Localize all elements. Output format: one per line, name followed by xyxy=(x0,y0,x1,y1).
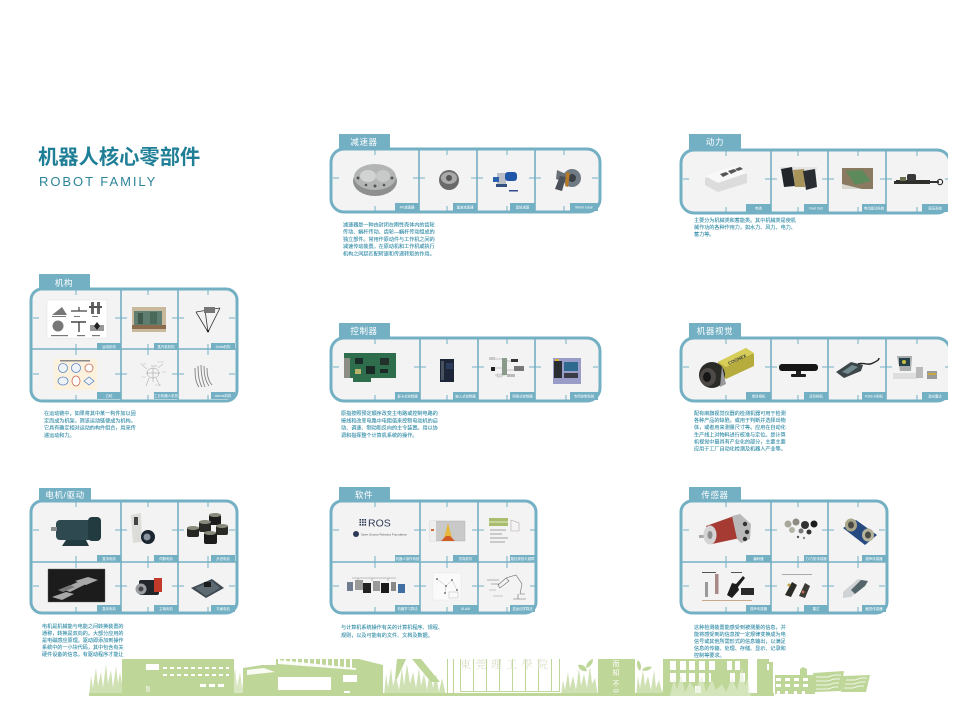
title xyxy=(38,145,200,189)
caption: 直流电机: 直流电机 xyxy=(102,556,116,561)
frame xyxy=(681,150,950,213)
text: 机器视觉 description: 生产线上对物料进行校准与定位。是计算 xyxy=(694,431,786,438)
image: path planning xyxy=(489,518,519,542)
caption: 路径规划与避障 xyxy=(510,555,535,562)
tab: 传感器 xyxy=(689,487,741,502)
text: 机构 description: 它具有确定相对运动的构件组合，用来传 xyxy=(44,424,136,432)
caption: 嵌入式控制器 xyxy=(453,392,478,400)
text: 机器视觉 description: 应用于工厂自动化检测及机器人产业等。 xyxy=(694,446,786,452)
image: PCB controller card xyxy=(344,353,396,382)
frame xyxy=(31,289,237,401)
caption: 凸轮: 凸轮 xyxy=(106,393,113,398)
tab: 减速器: 减速器 xyxy=(350,137,378,147)
text: 减速器 description: 减速器是一种由封闭在刚性壳体内的齿轮 xyxy=(343,222,435,228)
caption: Fuel Cell: Fuel Cell xyxy=(809,206,823,210)
image: spindle motor xyxy=(136,578,162,595)
image: worm gear xyxy=(555,169,581,191)
text: 动力 description: 蓄力等。 xyxy=(694,231,714,238)
text: 减速器 description: 传动、蜗杆传动、齿轮—蜗杆传动组成的 xyxy=(343,229,435,236)
school name: 東莞理工學院 xyxy=(460,656,552,672)
caption: 平面电机: 平面电机 xyxy=(216,606,230,611)
tab: 控制器 xyxy=(339,323,390,339)
icon: leaves xyxy=(578,659,652,671)
caption: 雷达 xyxy=(804,605,828,612)
image: industrial robot sketch xyxy=(140,362,166,386)
caption: 谐波减速器: 谐波减速器 xyxy=(457,204,474,210)
image: electric drive system xyxy=(842,168,873,189)
image: battery xyxy=(705,166,747,192)
image: machine learning network xyxy=(347,578,405,593)
image: acoustic sensors xyxy=(702,572,754,601)
text: 机器视觉 description: 各种产品的缺陷，或用于判断并选择出物 xyxy=(694,417,786,424)
text: 传感器 description: 控制等要求。 xyxy=(694,652,725,659)
caption: RV减速器: RV减速器 xyxy=(400,204,415,210)
image: planar motor xyxy=(191,579,224,598)
text: 电机/驱动 description: 系统中的一小块代码，其中包含有关 xyxy=(42,644,124,651)
text: 控制器 description: 原指按照预定顺序改变主电路或控制电路的 xyxy=(341,410,438,417)
caption: 电动驱动系统: 电动驱动系统 xyxy=(864,206,885,210)
caption: 网络式控制器 xyxy=(510,392,535,400)
image: servo motor and driver xyxy=(131,513,155,544)
text: 控制器 description: 接线和改变电路中电阻值来控制电动机的启 xyxy=(341,417,438,424)
text: 机器视觉 description: 体，或者用来测量尺寸等。应用在自动化 xyxy=(694,424,786,431)
caption: 激光雷达 xyxy=(922,392,948,400)
frame xyxy=(331,501,536,613)
frame xyxy=(331,338,600,401)
tower with motto: 不 xyxy=(612,680,620,688)
image: mechanical sketch xyxy=(195,365,212,387)
tab: 机器视觉: 机器视觉 xyxy=(697,326,733,336)
text: 机器视觉 description: 机视觉中最具有产业化的部分，主要主要 xyxy=(694,438,786,445)
image: radar boards xyxy=(782,574,812,598)
caption: 激光雷达: 激光雷达 xyxy=(928,394,942,398)
caption: Fuel Cell xyxy=(804,204,828,212)
caption: 超声传感器: 超声传感器 xyxy=(866,556,883,561)
image: industrial camera: COGNEX xyxy=(727,353,747,366)
caption: RGB-D相机 xyxy=(862,392,886,400)
tab: 机构: 机构 xyxy=(55,278,73,288)
panel: 减速器 xyxy=(331,134,600,212)
text: 软件 description: 与计算机系统操作有关的计算机程序、规程、 xyxy=(341,624,443,631)
image: gear reducer xyxy=(493,172,518,192)
image: industrial camera xyxy=(699,348,754,388)
caption: 机器学习算法 xyxy=(395,605,420,612)
caption: 仿真软件: 仿真软件 xyxy=(459,556,473,561)
tower with motto: 足 xyxy=(612,689,620,697)
caption: 专用控制系统 xyxy=(570,392,598,400)
text: 传感器 description: 能将感受到的信息按一定规律变换成为电 xyxy=(694,631,786,638)
tab: 机构 xyxy=(39,274,90,290)
image: ROS logo: Open Source Robotics Foundation xyxy=(361,532,407,536)
text: 电机/驱动 description: 通称，转换是双向的。大部分应用的 xyxy=(42,630,124,637)
image: ROS logo: ROS xyxy=(368,518,391,530)
caption: 超声传感器 xyxy=(862,555,886,562)
caption: 伺服电机 xyxy=(154,555,178,562)
image: simple machines chart xyxy=(47,300,107,338)
caption: 工业机器人机构 xyxy=(154,392,178,399)
caption: RGB-D相机: RGB-D相机 xyxy=(865,394,883,398)
caption: RV减速器 xyxy=(395,203,419,211)
caption: 逆运动学算法 xyxy=(510,605,535,612)
frame xyxy=(31,501,237,613)
tower with motto xyxy=(598,659,635,697)
caption: 工业机器人机构: 工业机器人机构 xyxy=(154,393,178,398)
text: 电机/驱动 description: 硬件设备的信息。有驱动程序才能让 xyxy=(42,651,124,658)
caption: 机器人操作系统 xyxy=(395,555,420,562)
text: 控制器 description: 调和指挥整个计算机系统的操作。 xyxy=(341,432,417,439)
building: A-shaped sculpture xyxy=(395,659,440,682)
title: ROBOT FAMILY xyxy=(39,174,157,189)
tab: 动力: 动力 xyxy=(706,137,724,147)
caption: 嵌入式控制器: 嵌入式控制器 xyxy=(455,394,476,398)
caption: SLAM: SLAM xyxy=(461,607,470,611)
image: ROS logo xyxy=(353,518,407,537)
panel: 电机/驱动 xyxy=(31,488,237,613)
image: encoder xyxy=(699,514,751,544)
image: cam chart xyxy=(54,359,97,390)
building: wave facades xyxy=(813,671,870,692)
caption: 液压系统 xyxy=(922,204,948,212)
caption: 触觉传感器: 触觉传感器 xyxy=(866,606,883,611)
caption: clavos机构 xyxy=(211,392,235,399)
text: 传感器 description: 信息的传输、处理、存储、显示、记录和 xyxy=(694,645,786,652)
text: 机构 description: 在运动链中，如果将其中某一构件加以固 xyxy=(44,410,136,417)
panel: 动力 xyxy=(681,134,950,213)
tab: 传感器: 传感器 xyxy=(701,490,729,500)
tab: 软件: 软件 xyxy=(355,490,373,500)
caption: 主轴电机 xyxy=(154,605,178,612)
caption: 伺服电机: 伺服电机 xyxy=(159,556,173,561)
gate colonnade xyxy=(447,656,560,696)
caption: 路径规划与避障: 路径规划与避障 xyxy=(511,556,535,561)
image: laser radar xyxy=(893,356,937,379)
text: 电机/驱动 description: 电机是机械能与电能之间转换装置的 xyxy=(42,623,124,630)
white cover for right page edge xyxy=(948,130,960,420)
caption: 机器人操作系统: 机器人操作系统 xyxy=(396,556,420,561)
building: left block xyxy=(122,659,234,695)
caption: 直线电机: 直线电机 xyxy=(102,606,116,611)
caption: 双目相机 xyxy=(804,392,828,400)
caption: 步进电机: 步进电机 xyxy=(216,556,230,561)
text: 软件 description: 规则，以及可能有的文件、文档及数据。 xyxy=(341,632,433,639)
image: inverse kinematics arm xyxy=(487,575,526,599)
text: 减速器 description: 机构之间起匹配转速和传递转矩的作用。 xyxy=(343,250,435,257)
image: steam engine photo xyxy=(132,307,166,332)
image: DC motor xyxy=(51,517,101,546)
tab: 电机/驱动: 电机/驱动 xyxy=(45,490,85,500)
image: network controller diagram xyxy=(489,357,524,377)
caption: 凸轮 xyxy=(97,392,121,399)
caption: SLAM xyxy=(453,605,478,612)
caption: 编码器: 编码器 xyxy=(753,556,764,561)
frame xyxy=(681,338,950,401)
caption: 编码器 xyxy=(746,555,771,562)
image: force/torque sensors xyxy=(784,518,818,539)
panel: 传感器 xyxy=(681,487,887,613)
text: 机构 description: 递运动和力。 xyxy=(44,432,75,439)
caption: 液压系统: 液压系统 xyxy=(928,206,942,210)
tab: 动力 xyxy=(689,134,741,150)
tower with motto: 知 xyxy=(612,668,620,677)
ground and grass xyxy=(89,664,774,696)
caption: 步进电机 xyxy=(211,555,235,562)
image: ultrasonic sensor xyxy=(843,518,877,545)
caption: 齿轮减速 xyxy=(510,203,535,211)
image: CNC control system xyxy=(553,358,581,384)
caption: 板卡式控制器: 板卡式控制器 xyxy=(397,394,418,398)
text: 传感器 description: 这种检测装置能感受到被测量的信息，并 xyxy=(694,624,786,631)
caption: 单目相机: 单目相机 xyxy=(752,394,766,398)
caption: 网络式控制器: 网络式控制器 xyxy=(512,394,533,398)
caption: 机器学习算法: 机器学习算法 xyxy=(397,606,418,611)
caption: 力/力矩传感器: 力/力矩传感器 xyxy=(805,556,827,561)
text: 机器视觉 description: 配有麻旗视觉仪器的检测机器可用于检测 xyxy=(694,410,786,417)
caption: clavos机构: clavos机构 xyxy=(215,393,232,398)
panel: 控制器 xyxy=(331,323,600,401)
panel: 机构 xyxy=(31,274,237,401)
text: 动力 description: 主要分为机械类和蓄能类。其中机械类是使机 xyxy=(694,217,796,224)
image: fuel cells xyxy=(780,167,817,190)
caption: 电池 xyxy=(746,204,771,212)
caption: 主轴电机: 主轴电机 xyxy=(159,606,173,611)
image: stereo camera Kinect xyxy=(779,364,818,377)
title: 机器人核心零部件 xyxy=(38,145,200,169)
image: RGB-D camera xyxy=(836,358,879,378)
tower with motto: 而 xyxy=(612,660,620,668)
image: SLAM plot xyxy=(433,573,461,600)
tab: 减速器 xyxy=(339,134,390,150)
building: low annex xyxy=(775,667,815,694)
caption: Worm Gear xyxy=(570,203,598,211)
panel: 机器视觉 xyxy=(681,323,950,401)
caption: 电池: 电池 xyxy=(755,206,762,210)
caption: 雷达: 雷达 xyxy=(813,606,820,611)
caption: Delta机构: Delta机构 xyxy=(216,344,231,349)
caption: 直流电机 xyxy=(97,555,121,562)
caption: 直线电机 xyxy=(97,605,121,612)
image: hydraulic system xyxy=(894,174,943,185)
caption: 板卡式控制器 xyxy=(395,392,420,400)
image: embedded controller xyxy=(440,359,454,382)
caption: 齿轮减速: 齿轮减速 xyxy=(516,204,530,210)
image: RV reducer xyxy=(353,164,397,196)
caption: 单目相机 xyxy=(746,392,771,400)
image: stepper motors xyxy=(187,513,228,544)
caption: 逆运动学算法: 逆运动学算法 xyxy=(512,606,533,611)
tab: 电机/驱动 xyxy=(39,488,91,502)
text: 控制器 description: 动、调速、制动和反向的主令装置。用以协 xyxy=(341,424,438,432)
caption: 视声传感器: 视声传感器 xyxy=(750,606,768,611)
caption: 仿真软件 xyxy=(453,555,478,562)
text: 动力 description: 械作功的各种作用力，如水力、风力、电力、 xyxy=(694,224,796,231)
caption: 触觉传感器 xyxy=(862,605,886,612)
frame xyxy=(331,149,600,212)
text: 减速器 description: 独立部件。常用作原动件与工作机之间的 xyxy=(343,236,435,243)
caption: Delta机构 xyxy=(211,343,235,350)
text: 传感器 description: 信号或其他所需形式的信息输出，以满足 xyxy=(694,638,786,645)
caption: 电动驱动系统 xyxy=(862,204,886,212)
caption: 专用控制系统: 专用控制系统 xyxy=(574,394,595,398)
footer: campus skyline xyxy=(89,656,870,697)
building: right block xyxy=(663,659,773,696)
caption: 双目相机: 双目相机 xyxy=(809,394,823,398)
text: 机构 description: 定而成为机架，则该运动链便成为机构。 xyxy=(44,417,136,424)
tab: 机器视觉 xyxy=(689,323,741,339)
caption: 平面电机 xyxy=(211,605,235,612)
caption: 蒸汽机机构 xyxy=(154,343,178,350)
image: harmonic reducer xyxy=(439,170,459,190)
caption: 运动机构 xyxy=(97,343,121,350)
text: 减速器 description: 减速传动装置。在原动机和工作机或执行 xyxy=(343,243,435,250)
caption: 蒸汽机机构: 蒸汽机机构 xyxy=(158,344,175,349)
tab: 软件 xyxy=(339,487,390,502)
building: central hall xyxy=(243,659,383,696)
caption: 运动机构: 运动机构 xyxy=(102,344,116,349)
image: Delta mechanism xyxy=(196,307,220,332)
caption: 力/力矩传感器 xyxy=(804,555,828,562)
text: 电机/驱动 description: 是电磁感应原理。驱动即添加到操作 xyxy=(42,637,124,644)
frame xyxy=(681,501,887,613)
image: simulation software xyxy=(430,521,465,541)
tab: 控制器: 控制器 xyxy=(350,326,378,336)
caption: 视声传感器 xyxy=(746,605,771,612)
image: linear motors xyxy=(48,569,105,602)
panel: 软件 xyxy=(331,487,536,613)
caption: 谐波减速器 xyxy=(453,203,477,211)
caption: Worm Gear: Worm Gear xyxy=(575,206,594,210)
image: tactile sensor xyxy=(843,579,868,598)
